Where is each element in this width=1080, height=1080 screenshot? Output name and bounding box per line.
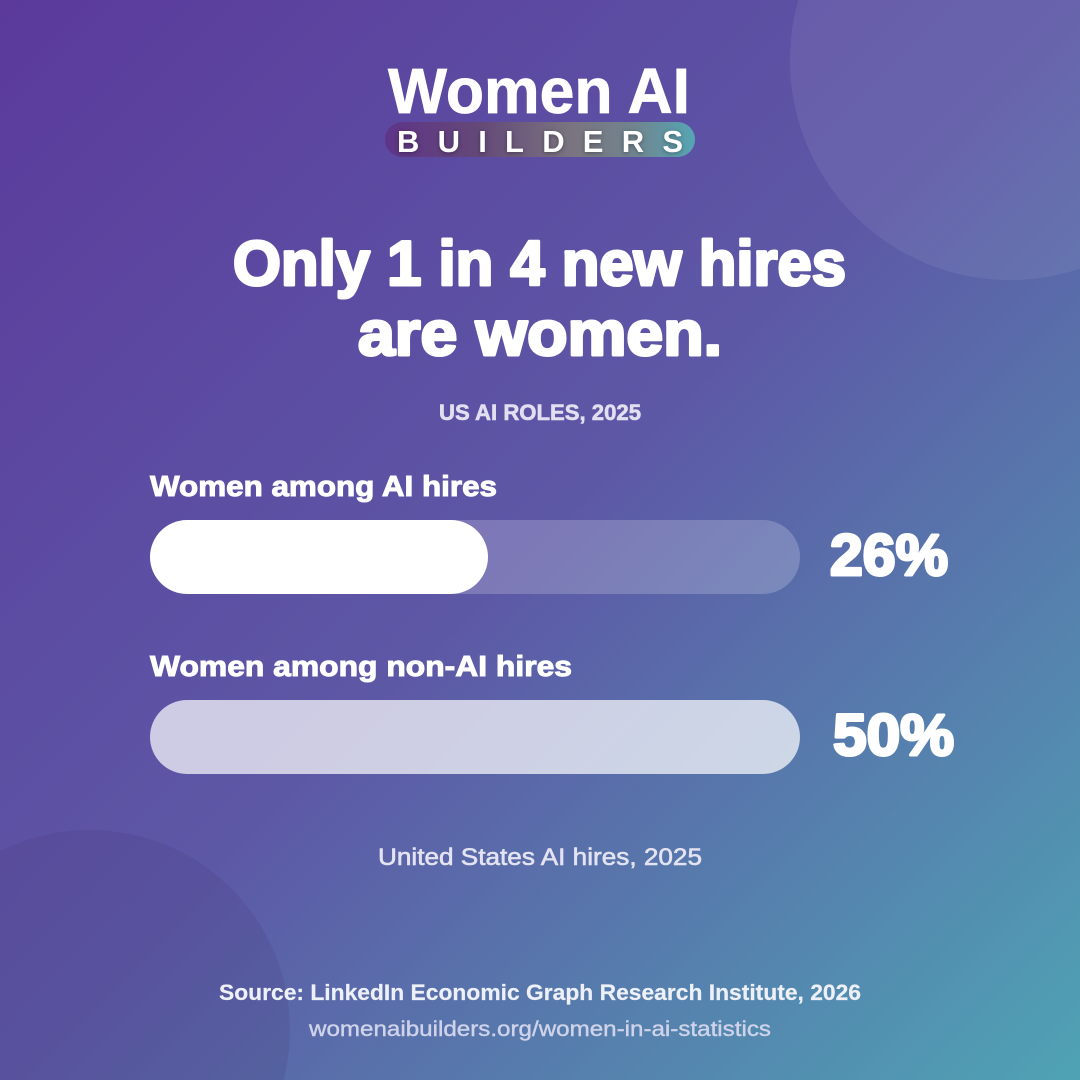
bar fill — [150, 700, 800, 774]
website url: womenaibuilders.org/women-in-ai-statistics — [308, 1018, 771, 1041]
subtitle: US AI ROLES, 2025 — [439, 400, 641, 425]
logo: Women AI Builders — [385, 55, 695, 159]
bar label: Women among non-AI hires — [150, 651, 572, 683]
bar value: 26% — [830, 523, 948, 588]
bar row: women among non-AI hires — [150, 651, 954, 774]
decorative circle: top right — [790, 0, 1080, 280]
title: Only 1 in 4 new hires — [233, 229, 846, 299]
logo pill: builders: BUILDERS — [397, 124, 683, 159]
logo wordmark: Women AI — [388, 55, 690, 127]
title: are women. — [358, 299, 722, 369]
source line: Source: LinkedIn Economic Graph Research Institute, 2026 — [219, 980, 861, 1005]
chart note: United States AI hires, 2025 — [378, 844, 702, 871]
decorative circle: bottom left — [0, 830, 290, 1080]
bar value: 50% — [833, 703, 954, 768]
bar fill — [150, 520, 488, 594]
bar track — [150, 520, 800, 594]
bar row: women among AI hires — [150, 471, 948, 594]
bar label: Women among AI hires — [150, 471, 497, 503]
title — [233, 229, 846, 369]
